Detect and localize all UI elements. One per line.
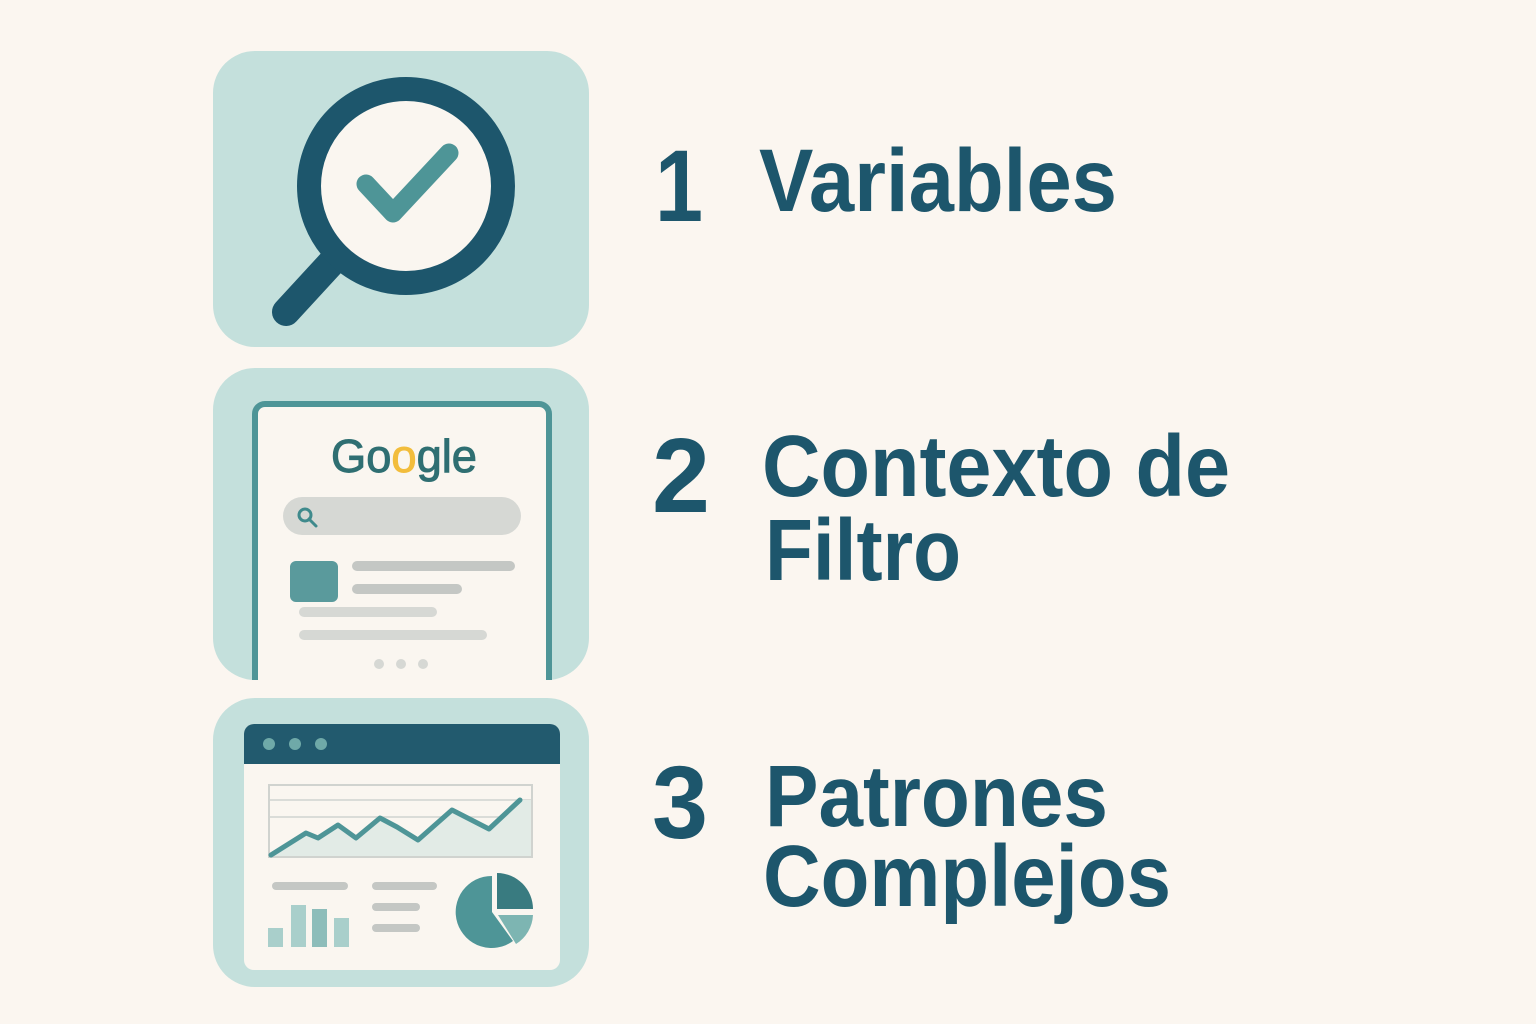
panel 1: magnifier icon (213, 51, 589, 347)
step 3 label: Complejos (763, 828, 1171, 925)
step 2 label: Contexto de (762, 418, 1230, 515)
google logo text: Google (331, 430, 477, 482)
step 2 label (652, 417, 1230, 599)
icon: magnifier with check (286, 89, 503, 312)
step 3 label (652, 745, 1171, 925)
pie chart (456, 873, 533, 948)
search results (290, 561, 515, 669)
step 3 label: 3 (652, 745, 708, 860)
step 1 label: 1 (655, 129, 703, 243)
panel 3: dashboard icon (213, 698, 589, 987)
step 1 label (655, 129, 1117, 243)
search bar (283, 497, 521, 535)
step 1 label: Variables (759, 130, 1117, 230)
step 3 label: Patrones (765, 748, 1108, 845)
bar chart (268, 882, 437, 947)
panel 2: google search icon (213, 368, 589, 680)
step 2 label: 2 (652, 417, 710, 535)
line chart (269, 785, 532, 857)
step 2 label: Filtro (765, 502, 961, 599)
